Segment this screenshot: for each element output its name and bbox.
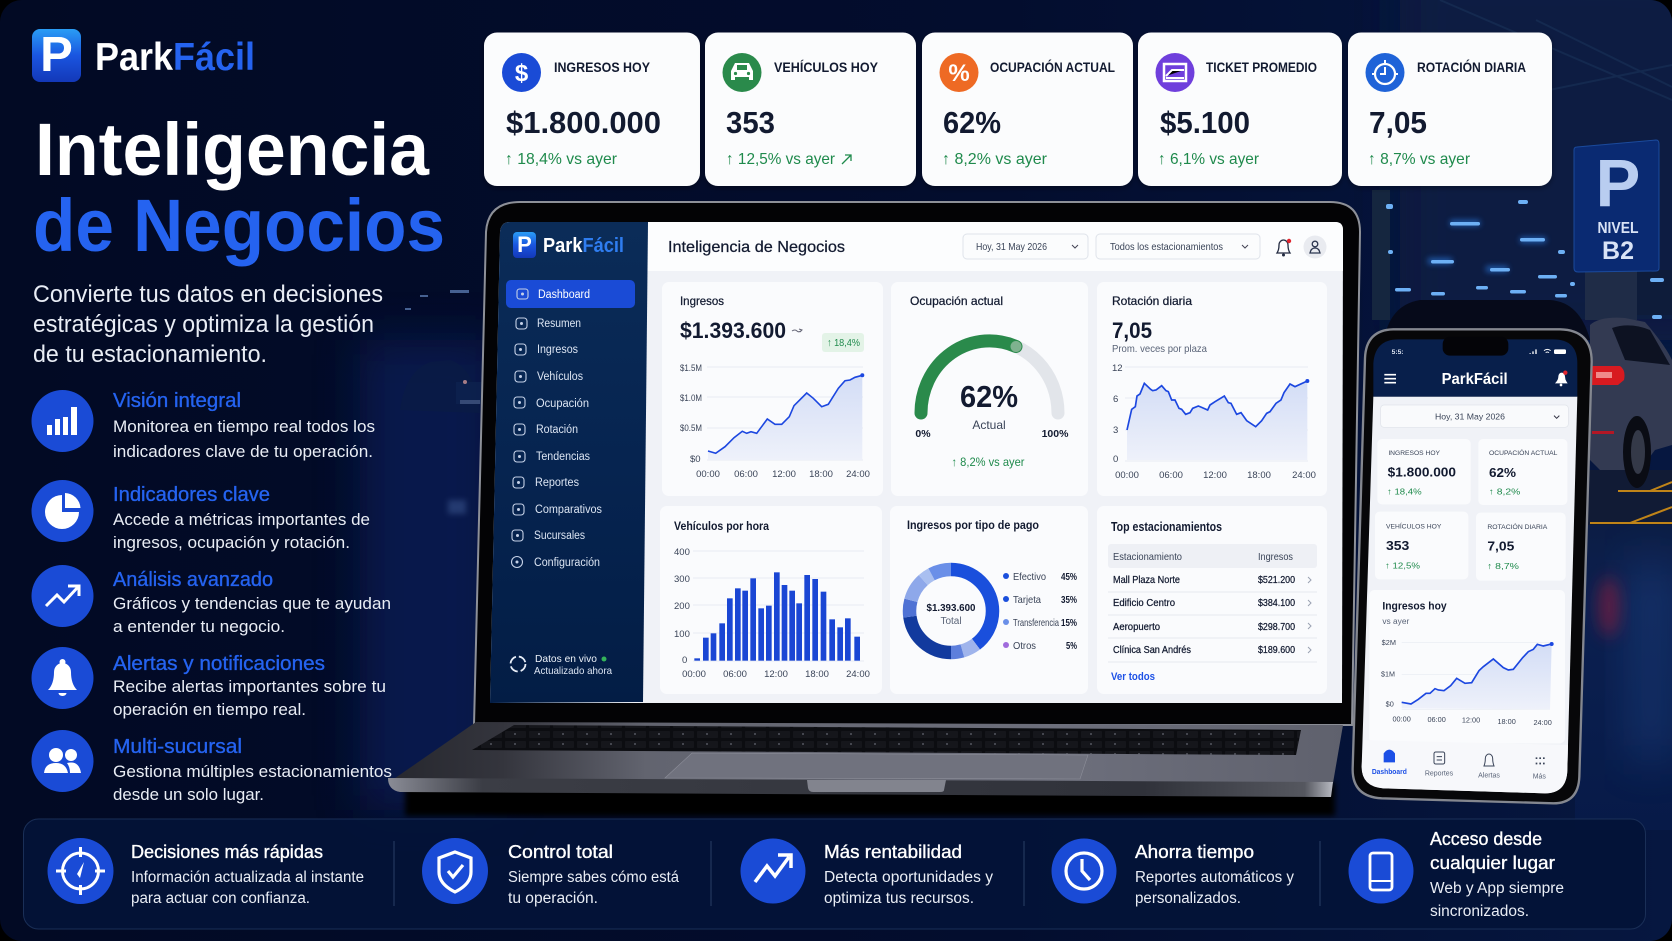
live status: Datos en vivo	[535, 653, 597, 665]
nav: Reportes	[1425, 752, 1454, 778]
feature: Indicadores clave: Accede a métricas importantes de	[113, 510, 370, 529]
feature: Alertas y notificaciones: Alertas y notificaciones	[113, 653, 325, 675]
phone KPI: Rotación diaria: ROTACIÓN DIARIA	[1487, 522, 1548, 531]
KPI: Vehículos hoy: 353	[726, 105, 775, 140]
phone KPI: Rotación diaria	[1476, 513, 1566, 581]
icon: P badge	[32, 28, 81, 82]
bar chart: 0	[682, 655, 687, 666]
donut legend: Otros	[1013, 640, 1036, 652]
nav: Más	[1533, 757, 1546, 780]
KPI: Ticket promedio: TICKET PROMEDIO	[1206, 60, 1317, 75]
donut chart: Total	[940, 616, 962, 627]
phone chart: Ingresos hoy: 00:00	[1392, 714, 1411, 723]
dashboard sidebar	[490, 222, 648, 703]
feature: Multi-sucursal: Multi-sucursal	[113, 736, 242, 758]
benefit: Ahorra tiempo: Ahorra tiempo	[1135, 842, 1254, 862]
sidebar menu: Reportes	[535, 477, 579, 489]
gauge: Actual	[972, 418, 1006, 432]
phone chart: Ingresos hoy	[1369, 590, 1565, 743]
ranking table: $189.600	[1258, 644, 1295, 656]
benefit: Acceso desde cualquier lugar: sincronizados.	[1430, 903, 1529, 920]
parking level sign: B2	[1602, 237, 1634, 265]
sidebar menu: Rotación	[536, 424, 578, 436]
card: Ocupación actual: Ocupación actual	[910, 294, 1003, 308]
icon: P badge: P	[40, 28, 73, 82]
intro text	[34, 284, 382, 362]
KPI: Ocupación actual: 62%	[943, 105, 1001, 140]
card: Rotación diaria	[1097, 282, 1327, 496]
card: Top estacionamientos	[1097, 506, 1327, 694]
feature: Visión integral	[32, 390, 375, 461]
icon: user avatar	[1304, 236, 1326, 258]
donut legend: Transferencia	[1013, 617, 1059, 629]
trackpad	[665, 753, 1088, 779]
line chart: rotación: 3	[1113, 425, 1118, 436]
benefits bar	[24, 819, 1646, 929]
car in the parking lot	[1590, 318, 1672, 488]
phone KPI: Ingresos hoy: ↑ 18,4%	[1387, 486, 1422, 496]
sidebar menu: Ingresos	[537, 344, 578, 356]
benefit: Acceso desde cualquier lugar: Web y App siempre	[1430, 880, 1564, 897]
line chart: ingresos: $0	[690, 454, 701, 465]
line chart: rotación: 12	[1112, 363, 1123, 374]
location filter	[1096, 234, 1260, 259]
phone KPI: Ocupación actual	[1478, 439, 1567, 505]
ranking table: Aeropuerto	[1113, 621, 1160, 633]
sidebar logo: ParkFácil	[543, 235, 624, 257]
ranking table: Edificio Centro	[1113, 597, 1175, 609]
phone chart: Ingresos hoy: 12:00	[1462, 716, 1480, 725]
benefit: Acceso desde cualquier lugar	[1348, 829, 1564, 920]
benefit: Ahorra tiempo: personalizados.	[1135, 890, 1241, 907]
sidebar menu: Comparativos	[535, 504, 602, 516]
benefit: Acceso desde cualquier lugar: cualquier lugar	[1430, 853, 1555, 873]
KPI cards	[484, 32, 1552, 186]
title: Inteligencia	[35, 108, 430, 191]
sidebar menu: Configuración	[534, 557, 600, 569]
card: Ingresos por tipo de pago	[890, 506, 1088, 694]
benefit: Más rentabilidad: Más rentabilidad	[824, 842, 962, 862]
icon: notification bell	[1277, 239, 1291, 256]
hinge notch	[807, 780, 946, 792]
bar chart: 18:00	[805, 669, 829, 680]
line chart: ingresos: $0.5M	[680, 423, 702, 434]
KPI: Ocupación actual	[922, 32, 1133, 186]
nav: Alertas: Alertas	[1478, 772, 1500, 779]
nav: Alertas	[1478, 754, 1500, 779]
line chart: rotación	[1112, 363, 1316, 481]
sidebar menu: Ocupación	[536, 398, 589, 410]
phone KPI: Rotación diaria: 7,05	[1487, 539, 1515, 554]
KPI: Ocupación actual: %	[948, 60, 970, 87]
dashboard top bar	[647, 222, 1343, 271]
gauge: 0%	[915, 428, 931, 440]
card: Ocupación actual	[891, 282, 1088, 496]
feature: Visión integral: Monitorea en tiempo real todos los	[113, 417, 375, 436]
feature: Análisis avanzado: a entender tu negocio.	[113, 617, 285, 636]
card: Top estacionamientos: Ver todos	[1111, 671, 1155, 683]
card: Ingresos por tipo de pago: Ingresos por tipo de pago	[907, 518, 1039, 532]
bar chart: 06:00	[723, 669, 747, 680]
benefit: Acceso desde cualquier lugar: Acceso desde	[1430, 829, 1542, 849]
phone KPI: Ocupación actual: OCUPACIÓN ACTUAL	[1489, 448, 1558, 457]
phone KPI: Ingresos hoy: INGRESOS HOY	[1388, 450, 1441, 457]
line chart: ingresos: $1.5M	[680, 363, 702, 374]
phone body	[1353, 329, 1592, 803]
benefit: Control total: Control total	[508, 842, 613, 862]
benefit: Más rentabilidad: Detecta oportunidades y	[824, 869, 993, 886]
intro text: estratégicas y optimiza la gestión	[33, 311, 374, 338]
benefit: Ahorra tiempo	[1052, 838, 1294, 907]
KPI: Ticket promedio: $5.100	[1160, 105, 1250, 140]
sidebar menu: Resumen	[537, 318, 581, 330]
feature: Multi-sucursal: desde un solo lugar.	[113, 785, 264, 804]
KPI: Ingresos hoy: $	[515, 60, 529, 87]
feature: Multi-sucursal: Gestiona múltiples estacionamientos	[113, 762, 392, 781]
KPI: Ocupación actual: ↑ 8,2% vs ayer	[942, 151, 1048, 168]
KPI: Vehículos hoy: ↑ 12,5% vs ayer	[726, 151, 836, 168]
bar chart: 00:00	[682, 669, 706, 680]
intro text: de tu estacionamiento.	[33, 341, 267, 368]
phone KPI: Vehículos hoy: ↑ 12,5%	[1385, 560, 1420, 570]
phone KPI: Ocupación actual: ↑ 8,2%	[1489, 487, 1521, 497]
phone date selector	[1381, 405, 1568, 427]
live status	[510, 654, 612, 674]
KPI: Ingresos hoy: INGRESOS HOY	[554, 60, 650, 75]
parking level sign: P	[1596, 146, 1640, 221]
sidebar logo: P	[517, 232, 532, 257]
phone chart: Ingresos hoy: vs ayer	[1382, 617, 1410, 626]
phone chart: Ingresos hoy: Ingresos hoy	[1382, 600, 1447, 612]
phone KPI: Vehículos hoy: VEHÍCULOS HOY	[1386, 521, 1442, 530]
KPI: Rotación diaria: ROTACIÓN DIARIA	[1417, 60, 1526, 75]
KPI: Ingresos hoy: $1.800.000	[506, 105, 661, 140]
sidebar menu: Tendencias	[536, 451, 590, 463]
sidebar logo	[513, 232, 624, 258]
feature: Visión integral: indicadores clave de tu operación.	[113, 442, 373, 461]
donut chart	[910, 570, 992, 652]
ranking table: Ingresos	[1258, 551, 1293, 563]
card: Vehículos por hora: Vehículos por hora	[674, 519, 769, 533]
benefit: Control total	[422, 838, 679, 907]
front lip	[388, 778, 1333, 797]
line chart: ingresos: $1.0M	[680, 393, 702, 404]
card: Rotación diaria: Rotación diaria	[1112, 294, 1192, 308]
phone header	[1373, 337, 1577, 397]
ranking table: $384.100	[1258, 597, 1295, 609]
nav: Dashboard: Dashboard	[1372, 769, 1407, 776]
ranking table: Estacionamiento	[1113, 551, 1182, 563]
line chart: ingresos: 06:00	[734, 469, 758, 480]
line chart: ingresos: 24:00	[846, 469, 870, 480]
benefit: Control total: Siempre sabes cómo está	[508, 869, 679, 886]
card: Ingresos: Ingresos	[680, 294, 724, 308]
card: Ocupación actual: ↑ 8,2% vs ayer	[952, 455, 1024, 469]
phone KPI: Ingresos hoy: $1.800.000	[1388, 465, 1456, 480]
KPI: Rotación diaria	[1348, 32, 1552, 186]
feature: Indicadores clave: ingresos, ocupación y rotación.	[113, 533, 350, 552]
donut legend: Efectivo	[1013, 571, 1046, 583]
laptop base deck	[388, 722, 1343, 797]
line chart: ingresos: 12:00	[772, 469, 796, 480]
logo: ParkFácil	[32, 28, 255, 82]
KPI: Rotación diaria: ↑ 8,7% vs ayer	[1368, 151, 1471, 168]
gauge: 100%	[1042, 428, 1069, 440]
donut legend: 35%	[1061, 594, 1078, 606]
ranking table: $521.200	[1258, 574, 1295, 586]
ranking table: Clínica San Andrés	[1113, 644, 1191, 656]
parking level sign: NIVEL	[1598, 220, 1639, 237]
phone KPI: Vehículos hoy: 353	[1386, 538, 1409, 553]
benefit: Decisiones más rápidas: para actuar con confianza.	[131, 890, 310, 907]
bar chart: 200	[674, 601, 690, 612]
bar chart: 12:00	[764, 669, 788, 680]
badge: 18,4%	[822, 333, 864, 352]
feature: Alertas y notificaciones: operación en tiempo real.	[113, 700, 306, 719]
title: de Negocios	[33, 184, 445, 267]
intro text: Convierte tus datos en decisiones	[33, 281, 383, 308]
phone chart: Ingresos hoy: 24:00	[1533, 718, 1552, 727]
line chart: rotación: 24:00	[1292, 470, 1316, 481]
phone date selector: Hoy, 31 May 2026	[1435, 411, 1505, 421]
sidebar menu: Sucursales	[534, 530, 585, 542]
line chart: rotación: 0	[1113, 454, 1118, 465]
phone chart: Ingresos hoy: $0	[1386, 700, 1394, 709]
line chart: ingresos	[680, 363, 870, 480]
line chart: ingresos: 18:00	[809, 469, 833, 480]
feature: Alertas y notificaciones	[32, 647, 386, 719]
ranking table: $298.700	[1258, 621, 1295, 633]
nav: Reportes: Reportes	[1425, 771, 1454, 778]
phone header: ParkFácil	[1442, 371, 1508, 388]
bar chart: 400	[674, 547, 690, 558]
laptop shadow	[405, 782, 1335, 816]
KPI: Rotación diaria: 7,05	[1369, 105, 1427, 140]
benefit: Más rentabilidad	[740, 838, 993, 907]
phone chart: Ingresos hoy: 18:00	[1497, 717, 1516, 726]
date filter	[963, 234, 1088, 259]
donut chart: $1.393.600	[926, 602, 976, 614]
phone chart: Ingresos hoy: $1M	[1381, 670, 1395, 679]
donut legend: Tarjeta	[1013, 594, 1041, 606]
feature list	[32, 390, 392, 804]
feature: Indicadores clave: Indicadores clave	[113, 484, 270, 506]
ranking table	[1108, 544, 1317, 662]
parking level sign	[1574, 140, 1659, 272]
nav: Dashboard	[1372, 750, 1407, 776]
feature: Multi-sucursal	[32, 730, 392, 804]
ranking table: Mall Plaza Norte	[1113, 574, 1180, 586]
phone header: 5:5:	[1392, 349, 1404, 356]
line chart: rotación: 18:00	[1247, 470, 1271, 481]
laptop lid and bezel	[474, 202, 1360, 725]
phone KPI: Rotación diaria: ↑ 8,7%	[1487, 561, 1519, 571]
phone KPI: Vehículos hoy	[1375, 512, 1468, 579]
card: Vehículos por hora	[660, 506, 882, 694]
donut legend: 15%	[1061, 617, 1078, 629]
logo wordmark: ParkFácil	[95, 36, 255, 79]
donut legend: 5%	[1066, 640, 1077, 652]
KPI: Ingresos hoy: ↑ 18,4% vs ayer	[505, 151, 618, 168]
sidebar menu	[506, 280, 635, 569]
bar chart: 300	[674, 574, 690, 585]
donut legend: 45%	[1061, 571, 1078, 583]
KPI: Ticket promedio: ↑ 6,1% vs ayer	[1158, 151, 1260, 168]
feature: Análisis avanzado	[32, 565, 391, 636]
live status: Actualizado ahora	[534, 665, 612, 677]
card: Ingresos	[662, 282, 883, 496]
card: Rotación diaria: 7,05	[1112, 318, 1152, 343]
phone screen	[1362, 337, 1577, 793]
feature: Análisis avanzado: Análisis avanzado	[113, 569, 273, 591]
bar chart: 100	[674, 629, 690, 640]
laptop	[388, 202, 1360, 797]
phone chart: Ingresos hoy: 06:00	[1427, 715, 1446, 724]
sidebar menu: Dashboard	[538, 289, 590, 301]
card: Top estacionamientos: Top estacionamientos	[1111, 520, 1222, 534]
KPI: Ingresos hoy	[484, 32, 700, 186]
benefit: Decisiones más rápidas: Información actualizada al instante	[131, 869, 364, 886]
feature: Indicadores clave	[32, 480, 370, 552]
gauge	[915, 341, 1069, 440]
phone bottom navigation	[1362, 740, 1568, 793]
location filter: Todos los estacionamientos	[1110, 241, 1223, 253]
bar chart	[674, 547, 870, 680]
benefit: Ahorra tiempo: Reportes automáticos y	[1135, 869, 1294, 886]
laptop screen	[490, 222, 1343, 703]
feature: Alertas y notificaciones: Recibe alertas importantes sobre tu	[113, 677, 386, 696]
phone KPI: Ocupación actual: 62%	[1489, 465, 1516, 480]
sidebar menu: Vehículos	[537, 371, 583, 383]
line chart: rotación: 6	[1113, 394, 1118, 405]
benefit: Más rentabilidad: optimiza tus recursos.	[824, 890, 974, 907]
benefit: Decisiones más rápidas	[48, 838, 364, 907]
KPI: Ticket promedio	[1138, 32, 1342, 186]
phone chart: Ingresos hoy: $2M	[1382, 638, 1396, 647]
KPI: Vehículos hoy	[705, 32, 916, 186]
card: Rotación diaria: Prom. veces por plaza	[1112, 343, 1207, 355]
KPI: Ocupación actual: OCUPACIÓN ACTUAL	[990, 60, 1115, 75]
feature: Visión integral: Visión integral	[113, 390, 241, 412]
nav: Más: Más	[1533, 773, 1546, 780]
date filter: Hoy, 31 May 2026	[976, 241, 1047, 253]
dashboard top bar: Inteligencia de Negocios	[668, 239, 845, 256]
phone	[1353, 329, 1592, 803]
badge: 18,4%: ↑ 18,4%	[827, 337, 860, 349]
card: Ingresos: $1.393.600	[680, 318, 786, 343]
donut legend	[1003, 571, 1078, 652]
KPI: Vehículos hoy: VEHÍCULOS HOY	[774, 60, 878, 75]
title	[33, 108, 445, 267]
gauge: 62%	[960, 379, 1018, 414]
line chart: rotación: 12:00	[1203, 470, 1227, 481]
line chart: rotación: 00:00	[1115, 470, 1139, 481]
feature: Análisis avanzado: Gráficos y tendencias que te ayudan	[113, 594, 391, 613]
benefit: Control total: tu operación.	[508, 890, 598, 907]
line chart: ingresos: 00:00	[696, 469, 720, 480]
line chart: rotación: 06:00	[1159, 470, 1183, 481]
benefit: Decisiones más rápidas: Decisiones más rápidas	[131, 842, 323, 862]
phone KPI: Ingresos hoy	[1377, 439, 1471, 504]
bar chart: 24:00	[846, 669, 870, 680]
keyboard	[472, 725, 1301, 755]
